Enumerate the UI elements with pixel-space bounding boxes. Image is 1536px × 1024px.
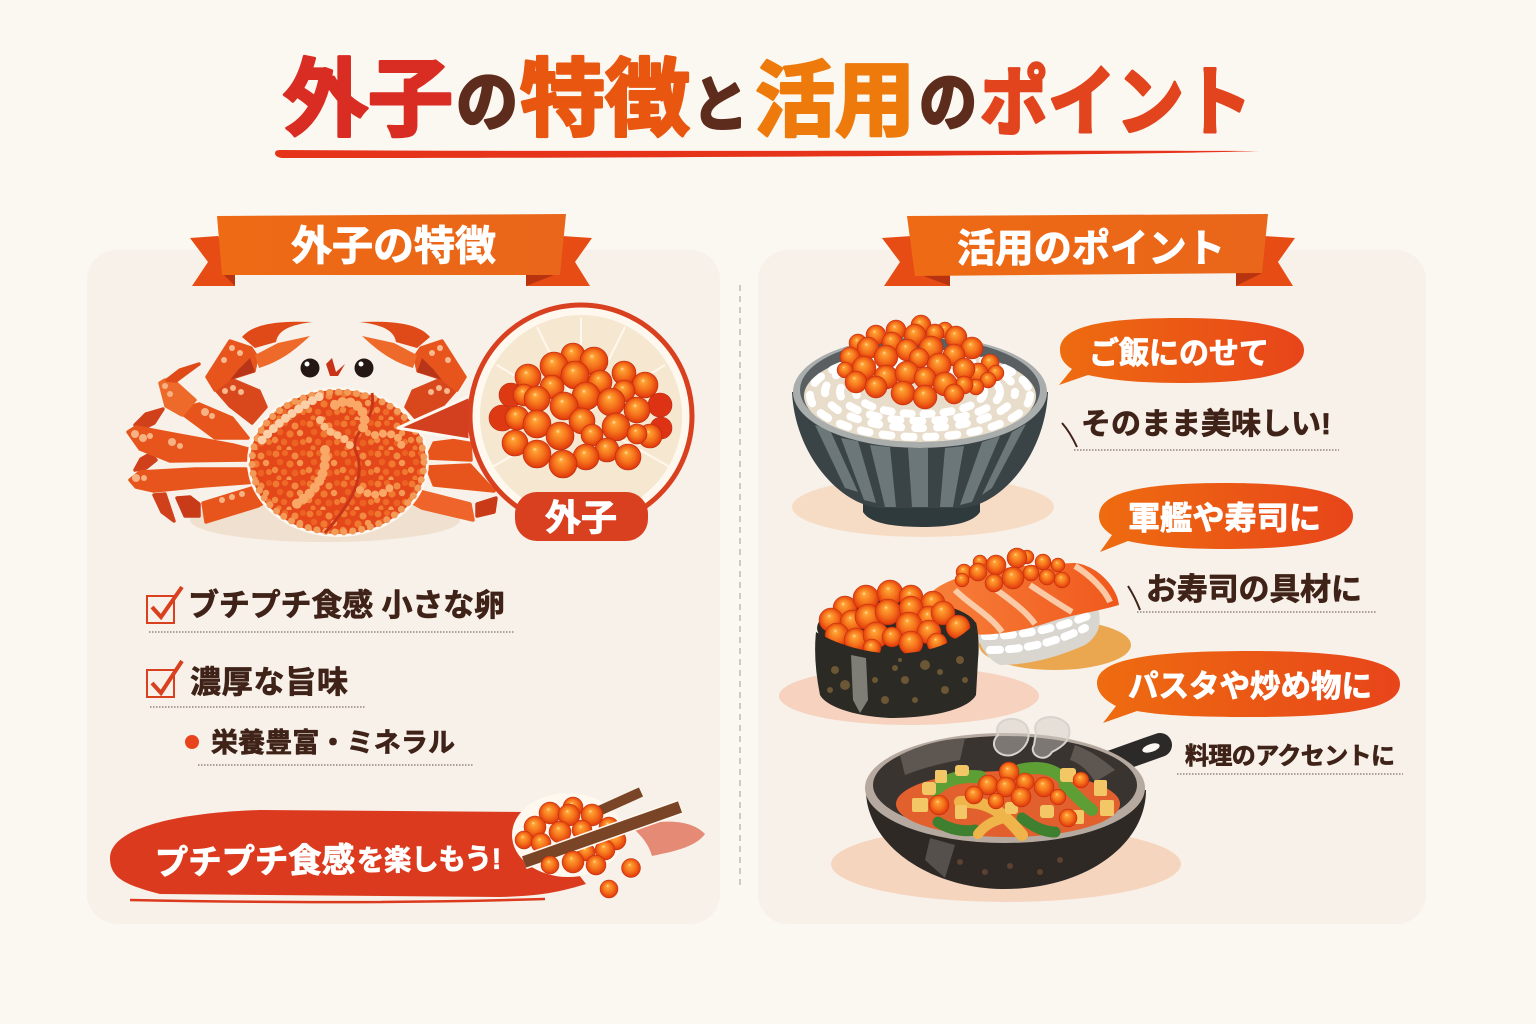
heading ribbon: features: 外子の特徴 bbox=[291, 223, 496, 269]
pan handle bbox=[1112, 741, 1161, 762]
crab right legs bbox=[402, 440, 496, 520]
title: ポイント bbox=[980, 61, 1252, 146]
speech bubble: pasta and stir-fry: パスタや炒め物に bbox=[1128, 669, 1372, 704]
title: の bbox=[919, 67, 977, 139]
illustration: crab bbox=[128, 322, 496, 542]
roe close-up callout bbox=[398, 305, 692, 541]
panel: usage bbox=[758, 250, 1426, 924]
roe on nigiri bbox=[955, 548, 1070, 592]
roe pile bbox=[489, 343, 672, 478]
heading ribbon: usage bbox=[882, 214, 1295, 286]
crab leg highlights bbox=[131, 383, 455, 504]
feature list sub item bbox=[185, 728, 473, 765]
rice grains bbox=[810, 353, 1030, 437]
feature list sub item: 栄養豊富・ミネラル bbox=[211, 728, 455, 758]
icon: chopsticks with roe bbox=[512, 792, 680, 898]
steam bbox=[994, 717, 1069, 758]
speech bubble: on rice: ご飯にのせて bbox=[1089, 336, 1269, 371]
stir-fry food bbox=[896, 765, 1120, 837]
icon: checkbox bbox=[147, 661, 182, 697]
feature list item 2: 濃厚な旨味 bbox=[190, 665, 348, 700]
caption: delicious as is: そのまま美味しい! bbox=[1081, 408, 1331, 441]
illustration: gunkan sushi bbox=[779, 580, 1039, 725]
speech bubble: on rice bbox=[1059, 318, 1304, 385]
crab right claw bbox=[360, 322, 465, 423]
illustration: nigiri sushi bbox=[929, 548, 1131, 670]
banner: enjoy texture bbox=[110, 792, 705, 902]
crab shell bbox=[247, 387, 429, 537]
title: の bbox=[456, 65, 518, 139]
speech bubble: gunkan and sushi bbox=[1099, 483, 1353, 552]
illustration: rice bowl bbox=[792, 315, 1054, 537]
banner: enjoy texture: を楽しもう! bbox=[357, 843, 501, 878]
feature list item 1 bbox=[147, 587, 515, 632]
caption: dish accent: 料理のアクセントに bbox=[1185, 743, 1395, 770]
speech bubble: pasta and stir-fry bbox=[1097, 651, 1400, 723]
feature list item 2 bbox=[147, 661, 365, 707]
roe label bbox=[515, 492, 648, 541]
title: 活用 bbox=[755, 56, 915, 147]
panel: features bbox=[87, 250, 720, 924]
title: 外子 bbox=[283, 53, 453, 148]
bowl stripes bbox=[815, 424, 1026, 507]
heading ribbon: usage: 活用のポイント bbox=[957, 228, 1225, 271]
roe on stir-fry bbox=[929, 762, 1089, 827]
banner: enjoy texture: プチプチ食感 bbox=[155, 842, 355, 882]
roe label: 外子 bbox=[545, 497, 617, 538]
feature list item 1: ブチプチ食感 小さな卵 bbox=[188, 588, 505, 623]
crab underside bbox=[278, 497, 398, 524]
title bbox=[283, 53, 1252, 148]
title underline bbox=[275, 150, 1260, 158]
roe on rice bbox=[837, 315, 1004, 409]
icon: checkbox bbox=[147, 587, 182, 623]
speech bubble: gunkan and sushi: 軍艦や寿司に bbox=[1128, 500, 1321, 536]
heading ribbon: features bbox=[190, 214, 592, 286]
crab left legs bbox=[128, 364, 274, 522]
crab eyes bbox=[300, 358, 374, 378]
caption: sushi topping: お寿司の具材に bbox=[1146, 572, 1362, 607]
illustration: frying pan bbox=[831, 717, 1181, 902]
title: 特徴 bbox=[520, 53, 690, 148]
title: と bbox=[692, 72, 748, 139]
crab left claw bbox=[207, 322, 312, 423]
